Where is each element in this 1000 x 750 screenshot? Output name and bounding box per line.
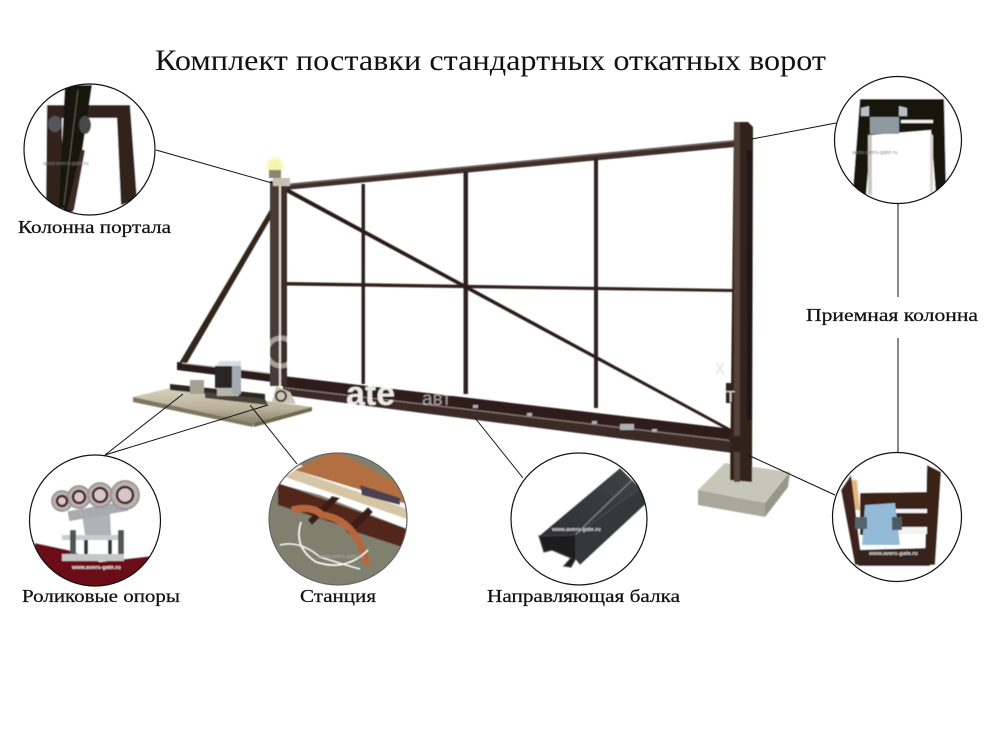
roller base plate bbox=[133, 380, 312, 427]
concrete foundation block bbox=[698, 463, 790, 517]
faded watermark over the gate: ate bbox=[346, 375, 395, 413]
label: roller supports: Роликовые опоры bbox=[22, 586, 180, 606]
panel: catcher bracket detail bbox=[830, 450, 970, 585]
signal lamp bbox=[267, 158, 283, 178]
faded watermark over the gate: авт bbox=[422, 389, 451, 410]
faded watermark over the gate: х bbox=[715, 357, 725, 379]
panel: receiving column detail bbox=[834, 76, 962, 204]
faded watermark over the gate: т bbox=[726, 385, 735, 407]
portal column bbox=[270, 178, 290, 386]
panel: roller supports detail bbox=[25, 450, 165, 590]
label: guide beam: Направляющая балка bbox=[487, 586, 680, 606]
sliding gate illustration bbox=[133, 122, 790, 517]
panel: roller supports detail: www.avers-gate.ru bbox=[71, 565, 121, 571]
panel: catcher bracket detail: www.avers-gate.ru bbox=[869, 551, 918, 557]
panel: guide beam detail: www.avers-gate.ru bbox=[551, 527, 601, 533]
label: portal column: Колонна портала bbox=[18, 217, 171, 237]
panel: guide beam detail bbox=[510, 452, 648, 586]
gate motor bbox=[215, 361, 241, 394]
left gate brace bbox=[177, 208, 274, 382]
faded watermark over the gate bbox=[267, 338, 735, 413]
label: station: Станция bbox=[300, 586, 376, 606]
panel: receiving column detail: www.avers-gate.ru bbox=[851, 150, 898, 156]
panel: station detail: www.avers-gate.ru bbox=[317, 554, 364, 560]
leader lines bbox=[105, 123, 898, 495]
title: Комплект поставки стандартных откатных ворот bbox=[155, 44, 826, 77]
guide beam fittings bbox=[473, 405, 657, 432]
panel: station detail bbox=[265, 450, 410, 590]
label: receiving column: Приемная колонна bbox=[806, 305, 978, 325]
panel: portal column detail bbox=[20, 80, 160, 220]
gate frame bars bbox=[283, 140, 735, 453]
panel: portal column detail: www.avers-gate.ru bbox=[42, 161, 89, 167]
receiving column bbox=[726, 122, 753, 482]
